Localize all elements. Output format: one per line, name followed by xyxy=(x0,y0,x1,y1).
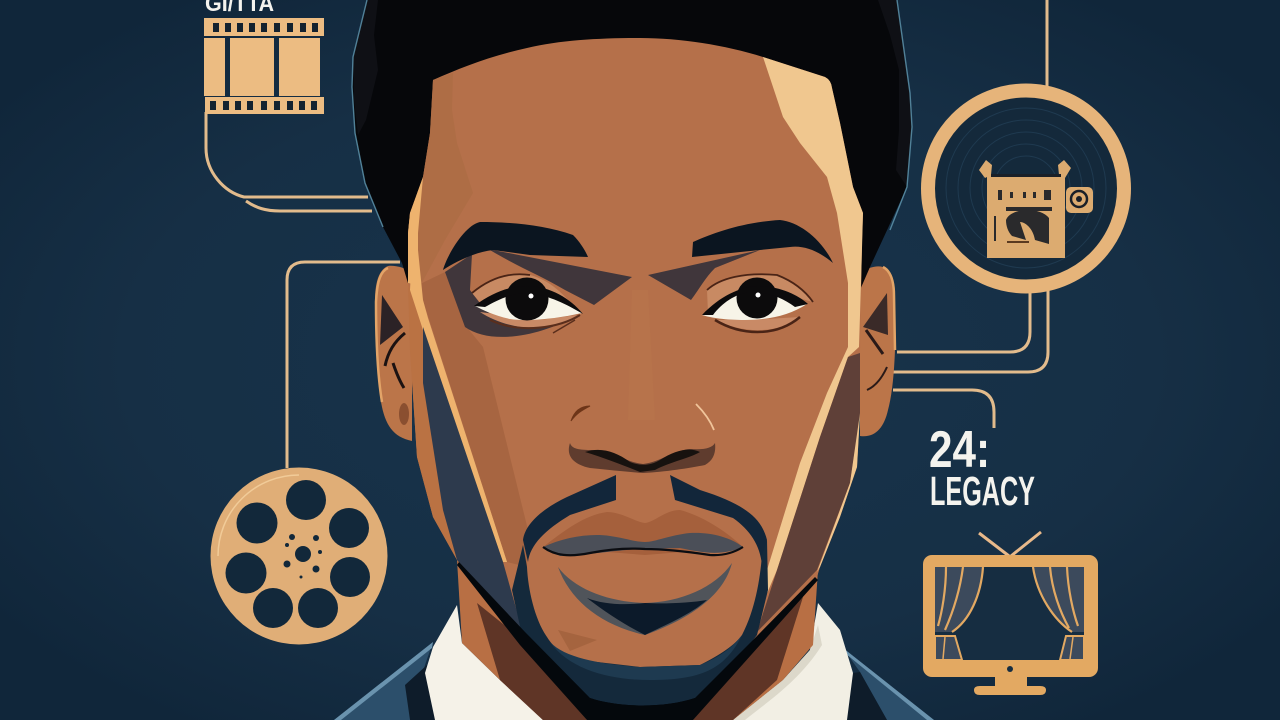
neck shadow: left xyxy=(477,603,587,720)
beard xyxy=(457,475,818,720)
beard: jaw line shadow xyxy=(457,562,818,720)
hair xyxy=(352,0,912,290)
cheek light strip: left xyxy=(410,250,507,562)
cheek shade: left xyxy=(418,272,528,567)
mouth xyxy=(543,510,743,651)
icon: vinyl medallion with building xyxy=(928,90,1124,286)
beard: chin light band xyxy=(550,635,742,680)
cheek outer strip: right xyxy=(817,413,860,572)
eye: right xyxy=(702,274,813,332)
text: 24: Legacy: LEGACY xyxy=(930,468,1035,514)
chin patch xyxy=(558,630,597,651)
cheek plane: right xyxy=(757,353,860,632)
icon: film strip xyxy=(204,18,324,114)
lower lip shadow xyxy=(587,598,707,635)
shirt collar: right xyxy=(733,603,853,720)
lower lip shade xyxy=(558,563,732,635)
upper lip xyxy=(543,510,743,555)
text: 24: Legacy xyxy=(929,421,1035,514)
nose bridge highlight xyxy=(628,290,655,420)
icon: building xyxy=(979,160,1093,258)
beard: chin mass xyxy=(512,540,768,720)
nose xyxy=(569,404,715,473)
eye: left xyxy=(472,274,583,333)
forehead highlight: right xyxy=(760,57,863,610)
forehead highlight: left xyxy=(408,177,507,562)
mouth line xyxy=(543,547,743,555)
suit: left xyxy=(334,642,435,720)
right curtain xyxy=(1033,567,1084,660)
face xyxy=(408,38,863,720)
neck xyxy=(457,560,818,720)
shirt collar: left xyxy=(425,605,543,720)
hair rim texture xyxy=(353,0,912,187)
ear: right xyxy=(860,266,895,436)
beard: moustache left xyxy=(523,475,616,562)
suit: right xyxy=(843,648,934,720)
eye socket shadow: left xyxy=(445,250,632,337)
eye socket shadow: right xyxy=(648,250,760,300)
beard: moustache right xyxy=(670,475,767,565)
connector lines xyxy=(206,0,1048,468)
cheek strip: left xyxy=(408,283,460,565)
hair outline highlight xyxy=(352,0,912,230)
neck shadow: right xyxy=(693,597,803,720)
cheek dark plane: left xyxy=(423,327,523,633)
ear: left xyxy=(375,266,412,441)
text: 24: Legacy: 24: xyxy=(929,421,990,479)
lip shade xyxy=(543,533,743,556)
eyebrow: right xyxy=(692,220,833,263)
forehead shade: left xyxy=(408,73,473,290)
eyebrow: left xyxy=(443,222,588,270)
left curtain xyxy=(935,567,983,660)
icon: film reel xyxy=(210,468,388,644)
portrait xyxy=(334,0,934,720)
icon: television with curtains xyxy=(923,532,1098,695)
